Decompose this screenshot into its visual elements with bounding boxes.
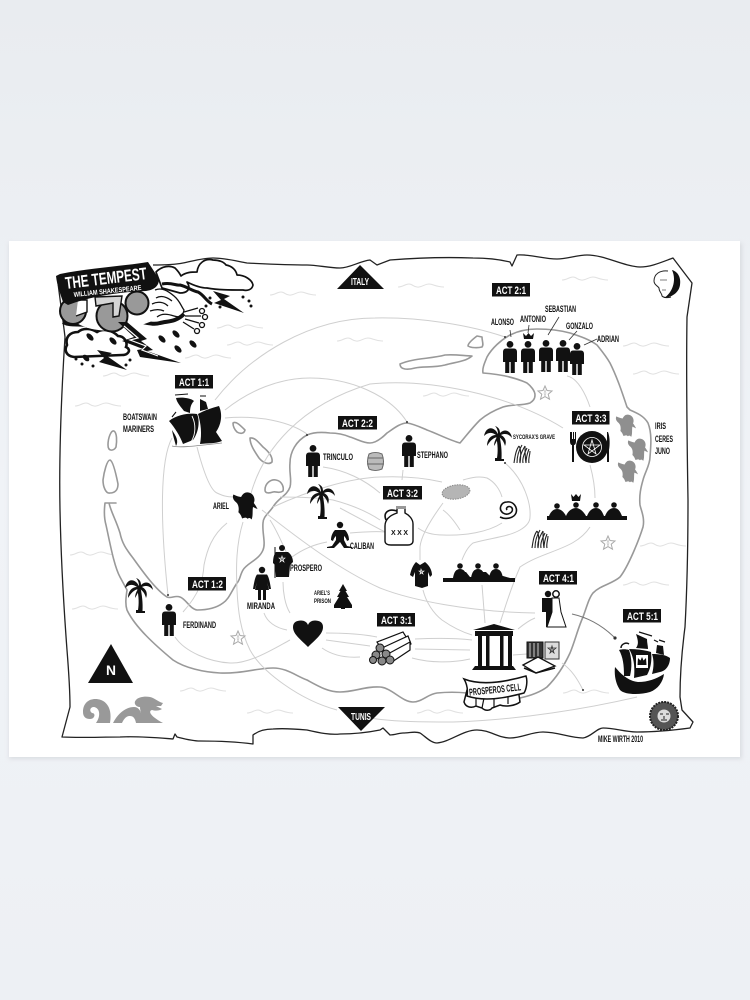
Prospero's cell temple	[472, 624, 516, 670]
title: The Tempest: THE TEMPEST	[64, 264, 148, 293]
Prospero's cell banner	[464, 676, 527, 710]
moon	[654, 270, 680, 298]
storm clouds	[63, 260, 253, 357]
Tunis marker	[338, 707, 385, 731]
character labels: BOATSWAIN	[123, 412, 157, 422]
logs	[370, 632, 411, 665]
robe	[410, 562, 432, 588]
route dots	[167, 336, 617, 691]
starfish	[231, 386, 615, 644]
ACT 5:1 ship	[615, 632, 670, 694]
person: Ferdinand	[162, 604, 176, 636]
spiral	[500, 502, 516, 518]
cell name: PROSPEROS CELL	[469, 682, 522, 699]
character labels: PROSPERO	[290, 563, 322, 573]
act labels: ACT 1:1	[179, 377, 209, 389]
character labels: PRISON	[314, 599, 331, 605]
character labels: MIKE WIRTH 2010	[598, 734, 643, 744]
character labels: IRIS	[655, 421, 666, 431]
islands	[103, 336, 483, 493]
sun	[650, 702, 678, 730]
character labels: JUNO	[655, 446, 670, 456]
wind face	[150, 289, 208, 334]
act labels: ACT 3:3	[576, 413, 606, 425]
character labels	[123, 304, 673, 744]
palm: north of Caliban	[307, 484, 335, 519]
wedding couple	[542, 591, 566, 627]
character labels: CERES	[655, 434, 673, 444]
barrel	[367, 452, 384, 470]
seaweed by grave	[514, 445, 530, 463]
act labels	[175, 283, 661, 627]
north marker	[88, 644, 133, 683]
character labels: MIRANDA	[247, 601, 275, 611]
character labels: TRINCULO	[323, 452, 353, 462]
ACT 1:1 ship	[169, 394, 222, 447]
act labels: ACT 5:1	[627, 611, 658, 623]
coastline: main land	[104, 329, 651, 702]
Italy marker	[337, 265, 384, 289]
Italy marker: ITALY	[351, 277, 369, 288]
Prospero	[273, 545, 293, 578]
character labels: ARIEL	[213, 501, 229, 511]
voyage route lines	[162, 318, 637, 722]
character labels: GONZALO	[566, 321, 593, 331]
cloud patch	[441, 483, 471, 501]
poster sheet	[9, 241, 742, 759]
ghost: Ariel	[226, 487, 262, 523]
act labels: ACT 2:1	[496, 285, 526, 297]
books	[523, 642, 559, 673]
title emblem	[56, 262, 166, 332]
character labels: MARINERS	[123, 424, 154, 434]
act labels: ACT 3:2	[387, 488, 418, 500]
grey spirit ghosts	[610, 410, 652, 486]
seaweed south	[532, 530, 548, 548]
character labels: STEPHANO	[417, 450, 448, 460]
dark route to final ship	[572, 614, 615, 638]
character labels: ANTONIO	[520, 314, 546, 324]
sea waves	[70, 277, 686, 713]
character labels: ADRIAN	[597, 334, 619, 344]
sea serpent	[83, 697, 163, 723]
Tunis marker: TUNIS	[351, 712, 371, 723]
act labels: ACT 1:2	[192, 579, 223, 591]
character labels: ARIEL'S	[314, 591, 330, 597]
table: three figures	[443, 563, 515, 582]
subtitle: William Shakespeare: WILLIAM SHAKESPEARE	[73, 285, 142, 299]
lightning bolts	[97, 291, 244, 370]
character labels: CALIBAN	[350, 541, 374, 551]
person: Stephano	[402, 435, 416, 467]
table: royal feast	[547, 494, 627, 520]
north marker: N	[106, 662, 116, 678]
heart	[293, 620, 323, 647]
act labels: ACT 4:1	[543, 573, 574, 585]
character labels: ALONSO	[491, 317, 514, 327]
person: Trinculo	[306, 445, 320, 477]
Miranda	[253, 567, 271, 600]
palm: Sycorax's grave	[484, 426, 512, 461]
character labels: SEBASTIAN	[545, 304, 576, 314]
palm: Ferdinand's shore	[125, 578, 153, 613]
character labels: FERDINAND	[183, 620, 216, 630]
rain drops	[74, 296, 252, 368]
act labels: ACT 2:2	[342, 418, 373, 430]
act labels: ACT 3:1	[381, 615, 412, 627]
jug	[385, 506, 413, 545]
character labels: SYCORAX'S GRAVE	[513, 435, 555, 441]
parchment border	[58, 255, 693, 744]
banquet setting	[570, 431, 610, 463]
Caliban	[327, 522, 352, 548]
tree: Ariel's prison	[334, 584, 352, 609]
people: court party	[503, 317, 597, 375]
jug label: X X X	[391, 530, 408, 537]
